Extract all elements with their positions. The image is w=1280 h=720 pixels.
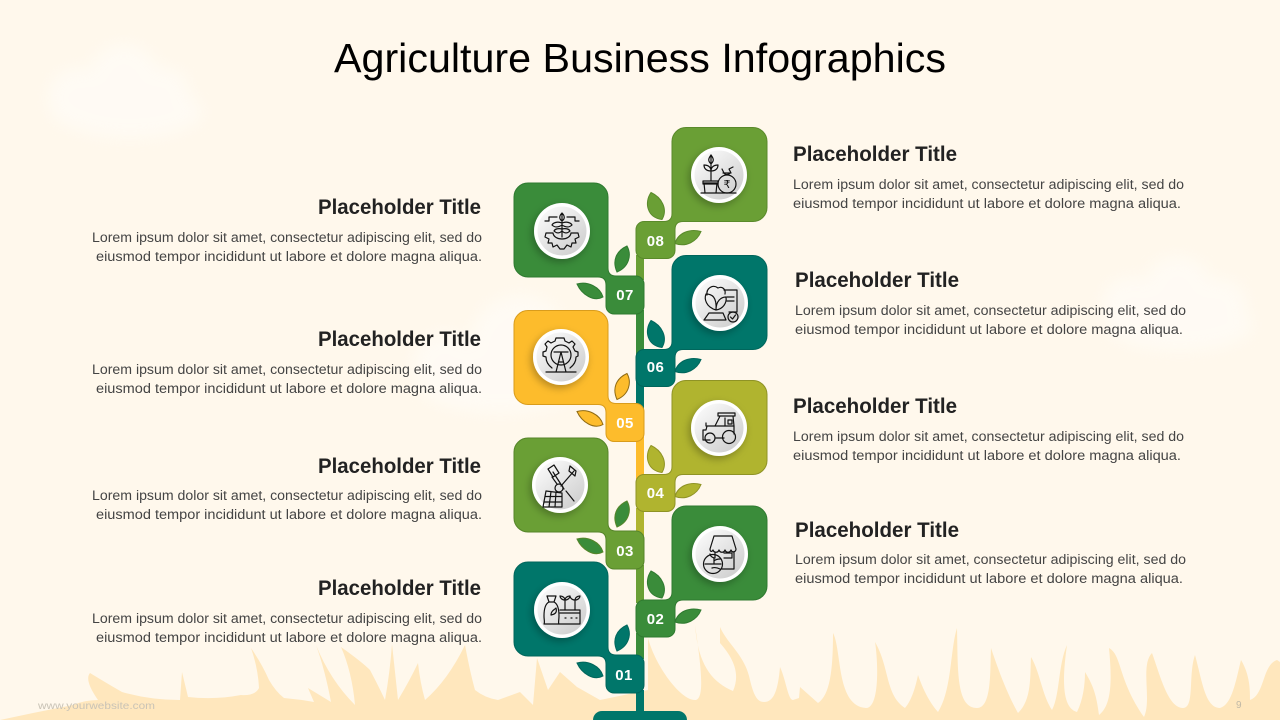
leaf 07 upper — [615, 246, 629, 272]
text block: item 05: eiusmod tempor incididunt ut labore et dolore magna aliqua. — [96, 381, 482, 396]
step 07 — [514, 183, 644, 314]
text block: item 02 — [795, 519, 1186, 586]
cloud: top left — [48, 44, 202, 138]
text block: item 05: Lorem ipsum dolor sit amet, consectetur adipiscing elit, sed do — [92, 362, 482, 377]
icon: plant and money bag — [691, 147, 747, 203]
number 06: 06 — [647, 359, 664, 376]
icon: tractor — [691, 400, 747, 456]
text block: item 03: Placeholder Title — [318, 455, 481, 478]
title: Agriculture Business Infographics — [334, 35, 946, 81]
page number: 9 — [1236, 700, 1242, 711]
icon: gear and tower — [533, 329, 589, 385]
leaf 01 upper — [615, 625, 629, 651]
text block: item 01: eiusmod tempor incididunt ut labore et dolore magna aliqua. — [96, 630, 482, 645]
text block: item 08: eiusmod tempor incididunt ut labore et dolore magna aliqua. — [793, 196, 1181, 211]
leaf 08 upper — [647, 192, 664, 220]
cloud: centre — [413, 295, 580, 413]
text block: item 03: eiusmod tempor incididunt ut labore et dolore magna aliqua. — [96, 507, 482, 522]
leaf 04 side — [675, 484, 701, 498]
leaf 08 side — [675, 231, 701, 245]
text block: item 04: Placeholder Title — [793, 395, 957, 418]
card 03 — [514, 438, 644, 569]
text block: item 06 — [795, 269, 1186, 337]
icon: shop and plant badge — [692, 526, 748, 582]
leaf 03 side — [577, 538, 603, 554]
text block: item 05: Placeholder Title — [318, 328, 481, 351]
text block: item 03 — [92, 455, 482, 522]
text block: item 02: Lorem ipsum dolor sit amet, consectetur adipiscing elit, sed do — [795, 552, 1186, 567]
card 05 — [514, 310, 644, 442]
step 05 — [514, 310, 644, 442]
number 04: 04 — [647, 485, 664, 502]
text block: item 06: eiusmod tempor incididunt ut labore et dolore magna aliqua. — [795, 322, 1183, 337]
step 03 — [514, 438, 644, 569]
card 06 — [636, 256, 767, 386]
leaf 06 upper — [647, 320, 664, 348]
card 01 — [514, 562, 644, 693]
card 07 — [514, 183, 644, 314]
step 01 — [514, 562, 644, 693]
leaf 01 side — [577, 662, 603, 678]
text block: item 07 — [92, 196, 482, 264]
leaf 07 side — [577, 283, 603, 299]
number 03: 03 — [616, 543, 634, 560]
leaf 02 side — [675, 609, 701, 623]
text block: item 01: Placeholder Title — [318, 577, 481, 600]
stem — [636, 255, 644, 714]
text block: item 02: Placeholder Title — [795, 519, 959, 542]
text block: item 08: Placeholder Title — [793, 143, 957, 166]
icon: gear and plant — [534, 203, 590, 259]
text block: item 03: Lorem ipsum dolor sit amet, consectetur adipiscing elit, sed do — [92, 488, 482, 503]
footer url: www.yourwebsite.com — [37, 701, 155, 712]
leaf 06 side — [675, 359, 701, 373]
text block: item 04: Lorem ipsum dolor sit amet, consectetur adipiscing elit, sed do — [793, 429, 1184, 444]
number 05: 05 — [616, 415, 634, 432]
text block: item 02: eiusmod tempor incididunt ut labore et dolore magna aliqua. — [795, 571, 1183, 586]
stem base — [593, 711, 687, 720]
cloud: right — [1102, 256, 1252, 351]
leaf 02 upper — [647, 571, 664, 598]
icon: leaf and document — [692, 275, 748, 331]
leaf 04 upper — [647, 446, 664, 472]
number 07: 07 — [616, 287, 634, 304]
text block: item 05 — [92, 328, 482, 396]
leaf 05 upper — [615, 374, 629, 400]
grass silhouette — [0, 625, 1280, 720]
leaf 03 upper — [615, 501, 629, 527]
number 08: 08 — [647, 233, 664, 250]
step 06 — [636, 256, 767, 386]
icon: solar panel and windmill — [532, 457, 588, 513]
number 02: 02 — [647, 611, 664, 628]
text block: item 06: Lorem ipsum dolor sit amet, consectetur adipiscing elit, sed do — [795, 303, 1186, 318]
text block: item 06: Placeholder Title — [795, 269, 959, 292]
card 02 — [636, 506, 767, 637]
text block: item 04 — [793, 395, 1184, 463]
text block: item 07: Placeholder Title — [318, 196, 481, 219]
text block: item 04: eiusmod tempor incididunt ut labore et dolore magna aliqua. — [793, 448, 1181, 463]
card 08 — [636, 128, 767, 258]
number 01: 01 — [615, 667, 633, 684]
leaf 05 side — [577, 411, 603, 426]
text block: item 08 — [793, 143, 1184, 211]
step 02 — [636, 506, 767, 637]
text block: item 07: Lorem ipsum dolor sit amet, consectetur adipiscing elit, sed do — [92, 230, 482, 245]
step 08 — [636, 128, 767, 258]
text block: item 07: eiusmod tempor incididunt ut labore et dolore magna aliqua. — [96, 249, 482, 264]
card 04 — [636, 380, 767, 512]
text block: item 08: Lorem ipsum dolor sit amet, consectetur adipiscing elit, sed do — [793, 177, 1184, 192]
text block: item 01: Lorem ipsum dolor sit amet, consectetur adipiscing elit, sed do — [92, 611, 482, 626]
step 04 — [636, 380, 767, 512]
rupee symbol: ₹ — [724, 178, 730, 191]
icon: seed bag and soil box — [534, 582, 590, 638]
text block: item 01 — [92, 577, 482, 645]
